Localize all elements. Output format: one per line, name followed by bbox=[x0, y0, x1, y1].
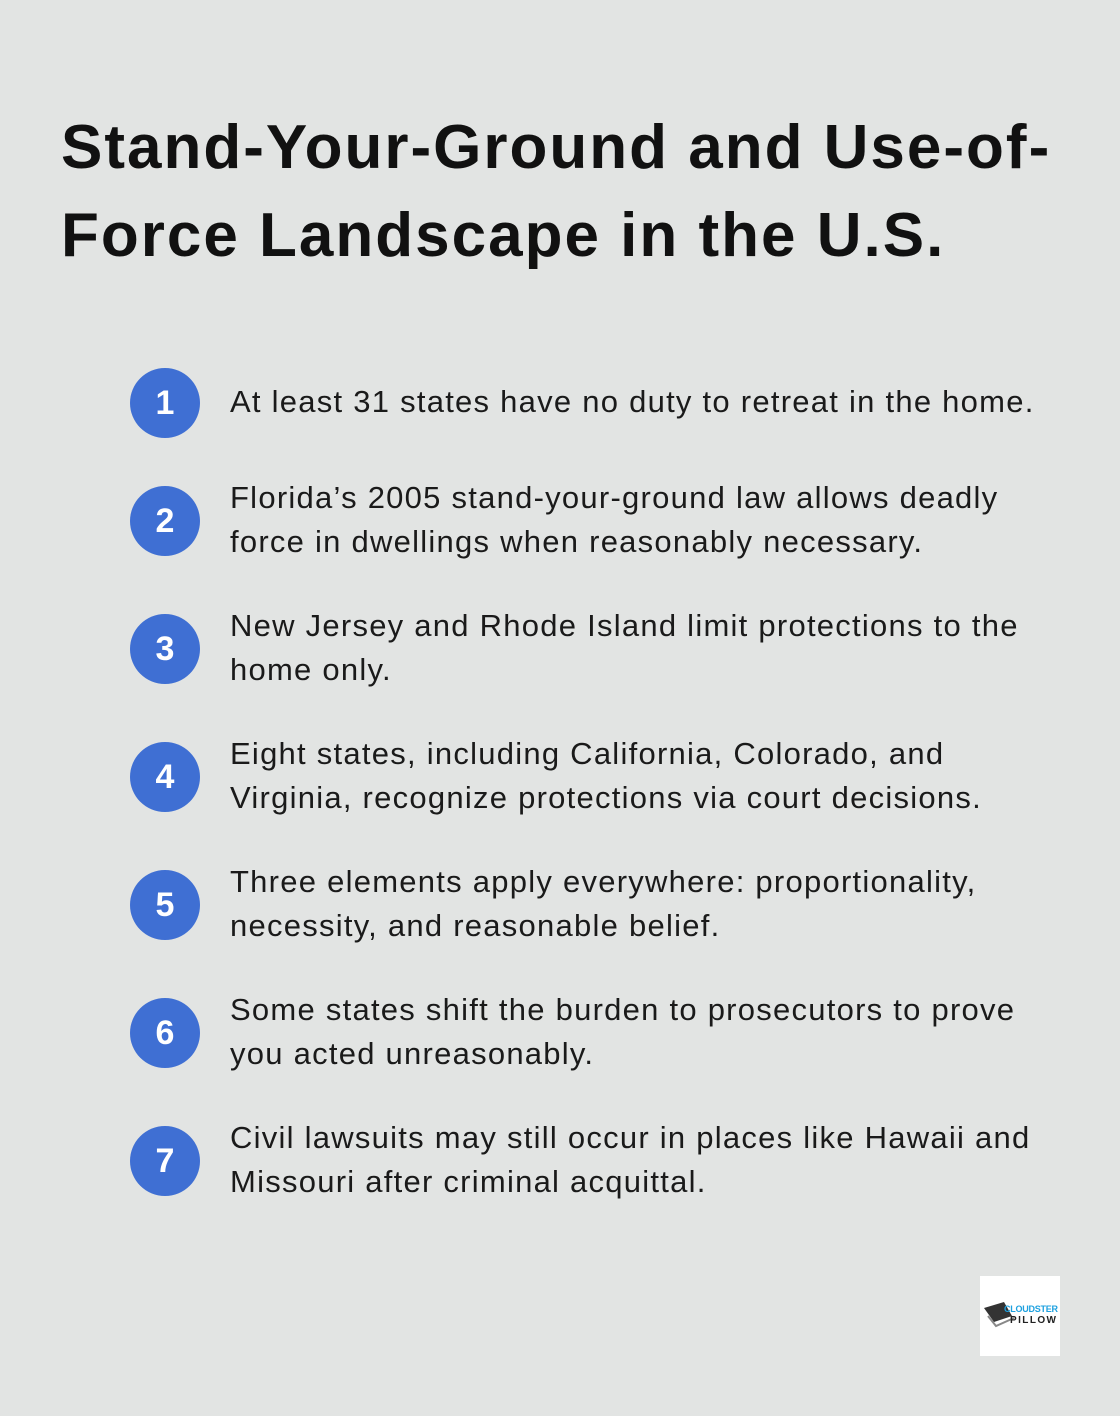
item 5: Three elements apply everywhere: proportionality, bbox=[230, 864, 976, 899]
item 4 bbox=[130, 736, 982, 815]
item 5: 5 bbox=[156, 886, 174, 924]
item 4: 4 bbox=[156, 758, 174, 796]
title: Force Landscape in the U.S. bbox=[61, 201, 945, 270]
item 1: 1 bbox=[156, 384, 174, 422]
logo: PILLOW bbox=[1010, 1315, 1057, 1326]
item 6: Some states shift the burden to prosecutors to prove bbox=[230, 992, 1015, 1027]
item 2: force in dwellings when reasonably necessary. bbox=[230, 524, 923, 559]
item 4: Eight states, including California, Colorado, and bbox=[230, 736, 944, 771]
item 6 bbox=[130, 992, 1015, 1071]
item 7: 7 bbox=[156, 1142, 174, 1180]
item 1: At least 31 states have no duty to retreat in the home. bbox=[230, 384, 1035, 419]
item 4: Virginia, recognize protections via court decisions. bbox=[230, 780, 982, 815]
logo bbox=[980, 1276, 1060, 1356]
title bbox=[61, 113, 1051, 270]
item 2: Florida’s 2005 stand-your-ground law allows deadly bbox=[230, 480, 998, 515]
title: Stand-Your-Ground and Use-of- bbox=[61, 113, 1051, 182]
item 2 bbox=[130, 480, 998, 559]
item 3: New Jersey and Rhode Island limit protections to the bbox=[230, 608, 1019, 643]
item 3: home only. bbox=[230, 652, 392, 687]
item 7: Missouri after criminal acquittal. bbox=[230, 1164, 707, 1199]
item 1 bbox=[130, 368, 1035, 438]
item 2: 2 bbox=[156, 502, 174, 540]
item 7 bbox=[130, 1120, 1030, 1199]
item 6: you acted unreasonably. bbox=[230, 1036, 594, 1071]
logo: CLOUDSTER bbox=[1004, 1304, 1058, 1314]
item 6: 6 bbox=[156, 1014, 174, 1052]
item 3 bbox=[130, 608, 1019, 687]
item 5: necessity, and reasonable belief. bbox=[230, 908, 720, 943]
item 5 bbox=[130, 864, 976, 943]
item 3: 3 bbox=[156, 630, 174, 668]
item 7: Civil lawsuits may still occur in places like Hawaii and bbox=[230, 1120, 1030, 1155]
